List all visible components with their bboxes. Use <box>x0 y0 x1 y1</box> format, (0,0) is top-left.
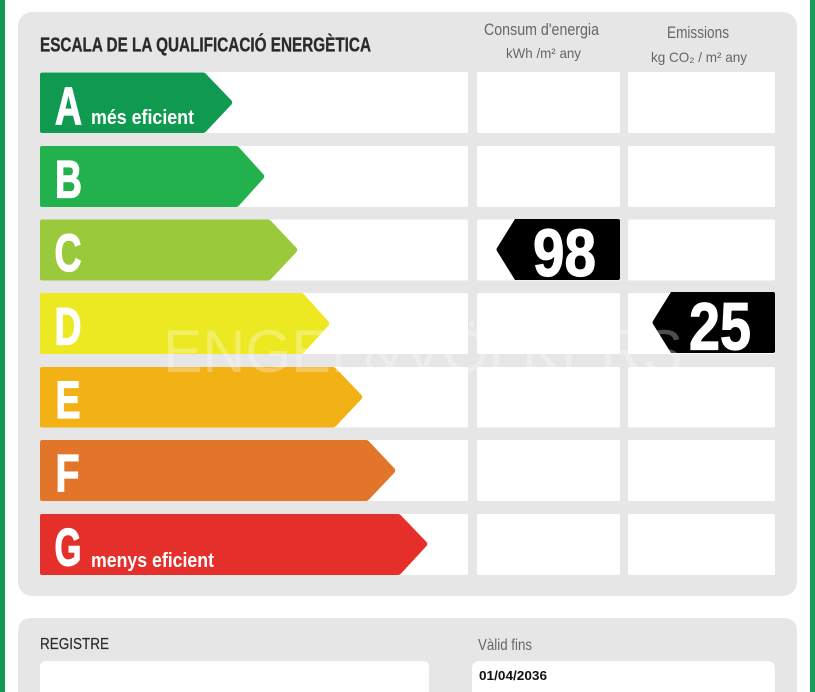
emissions marker: 25: 25 <box>689 290 751 364</box>
label: registre: REGISTRE <box>40 636 109 653</box>
rating bar D <box>40 293 329 356</box>
column heading: emissions <box>651 23 747 65</box>
column heading: energy consumption <box>484 20 599 61</box>
white cells: emissions column <box>628 72 775 575</box>
rating bar F: F <box>56 444 80 504</box>
label: valid until: Vàlid fins <box>478 637 532 654</box>
rating bar G: G <box>54 518 82 578</box>
heading: energy rating scale: ESCALA DE LA QUALIFICACIÓ ENERGÈTICA <box>40 32 371 56</box>
rating bar B <box>40 146 264 210</box>
rating bar G: menys eficient <box>91 550 214 572</box>
rating bar B: B <box>55 150 82 210</box>
energy consumption marker: 98 <box>496 216 620 291</box>
rating bar C: C <box>54 224 82 283</box>
panel: registration and validity <box>18 618 797 692</box>
energy consumption marker: 98: 98 <box>533 216 596 291</box>
column heading: emissions: Emissions <box>667 23 729 42</box>
left green border <box>0 0 5 692</box>
rating bar E: E <box>56 371 80 430</box>
column heading: emissions: kg CO₂ / m² any <box>651 49 747 65</box>
emissions marker: 25 <box>652 290 775 364</box>
rating bar E <box>40 367 362 430</box>
rating bar A <box>40 72 232 136</box>
column heading: energy consumption: kWh /m² any <box>506 45 581 61</box>
white cells: energy consumption column <box>477 72 620 575</box>
watermark: ENGEL&VÖLKERS <box>163 318 683 385</box>
validity date field: 01/04/2036 <box>479 669 547 683</box>
rating bar A: més eficient <box>91 107 194 129</box>
registration field <box>40 661 429 692</box>
validity date field <box>472 661 775 692</box>
white row backgrounds: scale column <box>40 72 468 575</box>
rating bar A: A <box>55 78 82 136</box>
right green border <box>810 0 815 692</box>
rating bar F <box>40 440 395 504</box>
rating bar D: D <box>54 298 82 356</box>
column heading: energy consumption: Consum d'energia <box>484 20 599 39</box>
rating bar C <box>40 220 297 283</box>
rating bar G <box>40 514 427 578</box>
